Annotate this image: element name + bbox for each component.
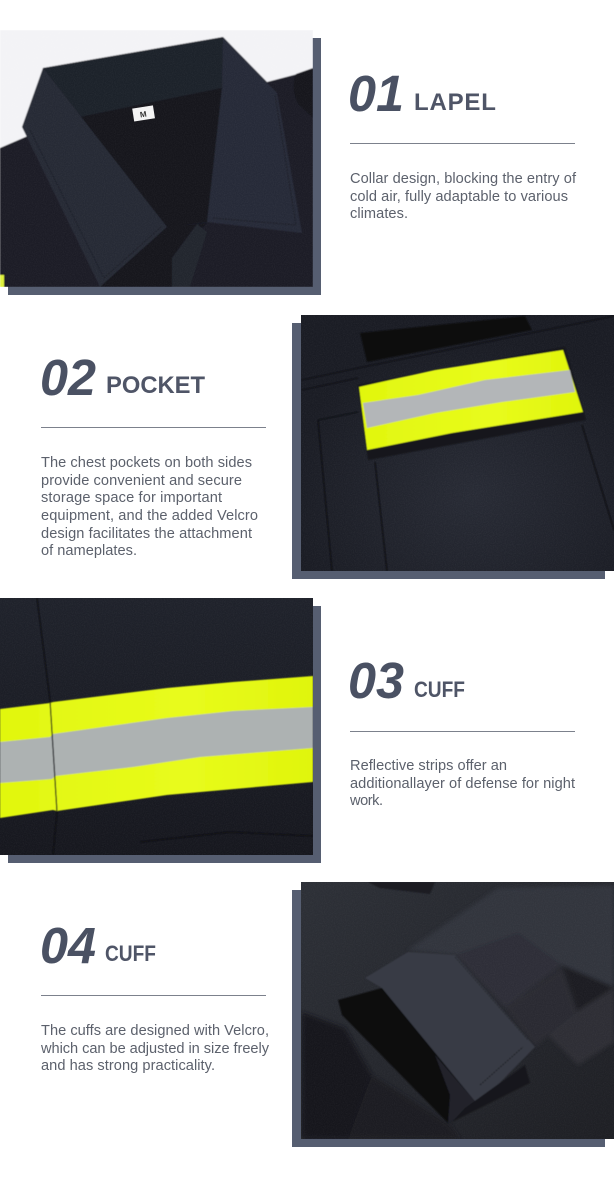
- divider: [41, 995, 266, 996]
- number 02: 02: [40, 349, 96, 406]
- text block: strip description: work.: [349, 793, 383, 809]
- text block: lapel description: cold air, fully adaptable to various: [350, 189, 568, 205]
- panel: 01 lapel: [0, 30, 577, 295]
- text block: pocket description: equipment, and the added Velcro: [41, 508, 258, 524]
- divider: [350, 143, 575, 144]
- divider: [41, 427, 266, 428]
- size label: [132, 105, 155, 121]
- heading: lapel: LAPEL: [414, 89, 497, 116]
- text block: cuff description: which can be adjusted in size freely: [40, 1041, 270, 1057]
- text block: cuff description: The cuffs are designed with Velcro,: [41, 1023, 269, 1039]
- photo: jacket collar: [0, 30, 313, 287]
- image shadow block: [292, 890, 605, 1147]
- text block: pocket description: design facilitates the attachment: [41, 526, 252, 542]
- pocket flap: [358, 347, 586, 460]
- heading: cuff: CUFF: [414, 677, 465, 702]
- panel: 03 cuff reflective strip: [0, 598, 575, 863]
- text block: pocket description: of nameplates.: [41, 543, 137, 559]
- image shadow block: [8, 38, 321, 295]
- text block: strip description: additionallayer of defense for night: [350, 776, 575, 792]
- image shadow block: [292, 323, 605, 579]
- photo: sleeve cuff: [301, 882, 614, 1139]
- number 03: 03: [348, 652, 404, 709]
- text block: cuff description: and has strong practicality.: [41, 1058, 215, 1074]
- sleeve: [408, 885, 614, 988]
- text block: lapel description: climates.: [350, 206, 408, 222]
- photo: chest pocket: [301, 315, 614, 571]
- text block: pocket description: The chest pockets on both sides: [41, 455, 252, 471]
- text block: strip description: Reflective strips offer an: [350, 758, 507, 774]
- text block: pocket description: provide convenient and secure: [41, 473, 242, 489]
- image shadow block: [8, 606, 321, 863]
- cuff flap: [365, 952, 535, 1105]
- divider: [350, 731, 575, 732]
- left pocket: [302, 1012, 372, 1139]
- velcro band: [452, 1065, 530, 1122]
- number 01: 01: [348, 65, 404, 122]
- photo: reflective strip: [0, 598, 313, 855]
- text block: pocket description: storage space for important: [41, 490, 222, 506]
- text block: lapel description: Collar design, blocking the entry of: [350, 171, 577, 187]
- photo: jacket collar: M: [139, 109, 148, 119]
- number 04: 04: [40, 917, 96, 974]
- heading: pocket: POCKET: [106, 372, 205, 399]
- panel: 02 pocket: [40, 315, 614, 579]
- cuff inner: [338, 988, 478, 1123]
- panel: 04 cuff velcro: [40, 882, 614, 1147]
- velcro strip: [360, 316, 532, 362]
- reflective strip: [359, 350, 583, 450]
- heading: cuff: CUFF: [105, 941, 156, 966]
